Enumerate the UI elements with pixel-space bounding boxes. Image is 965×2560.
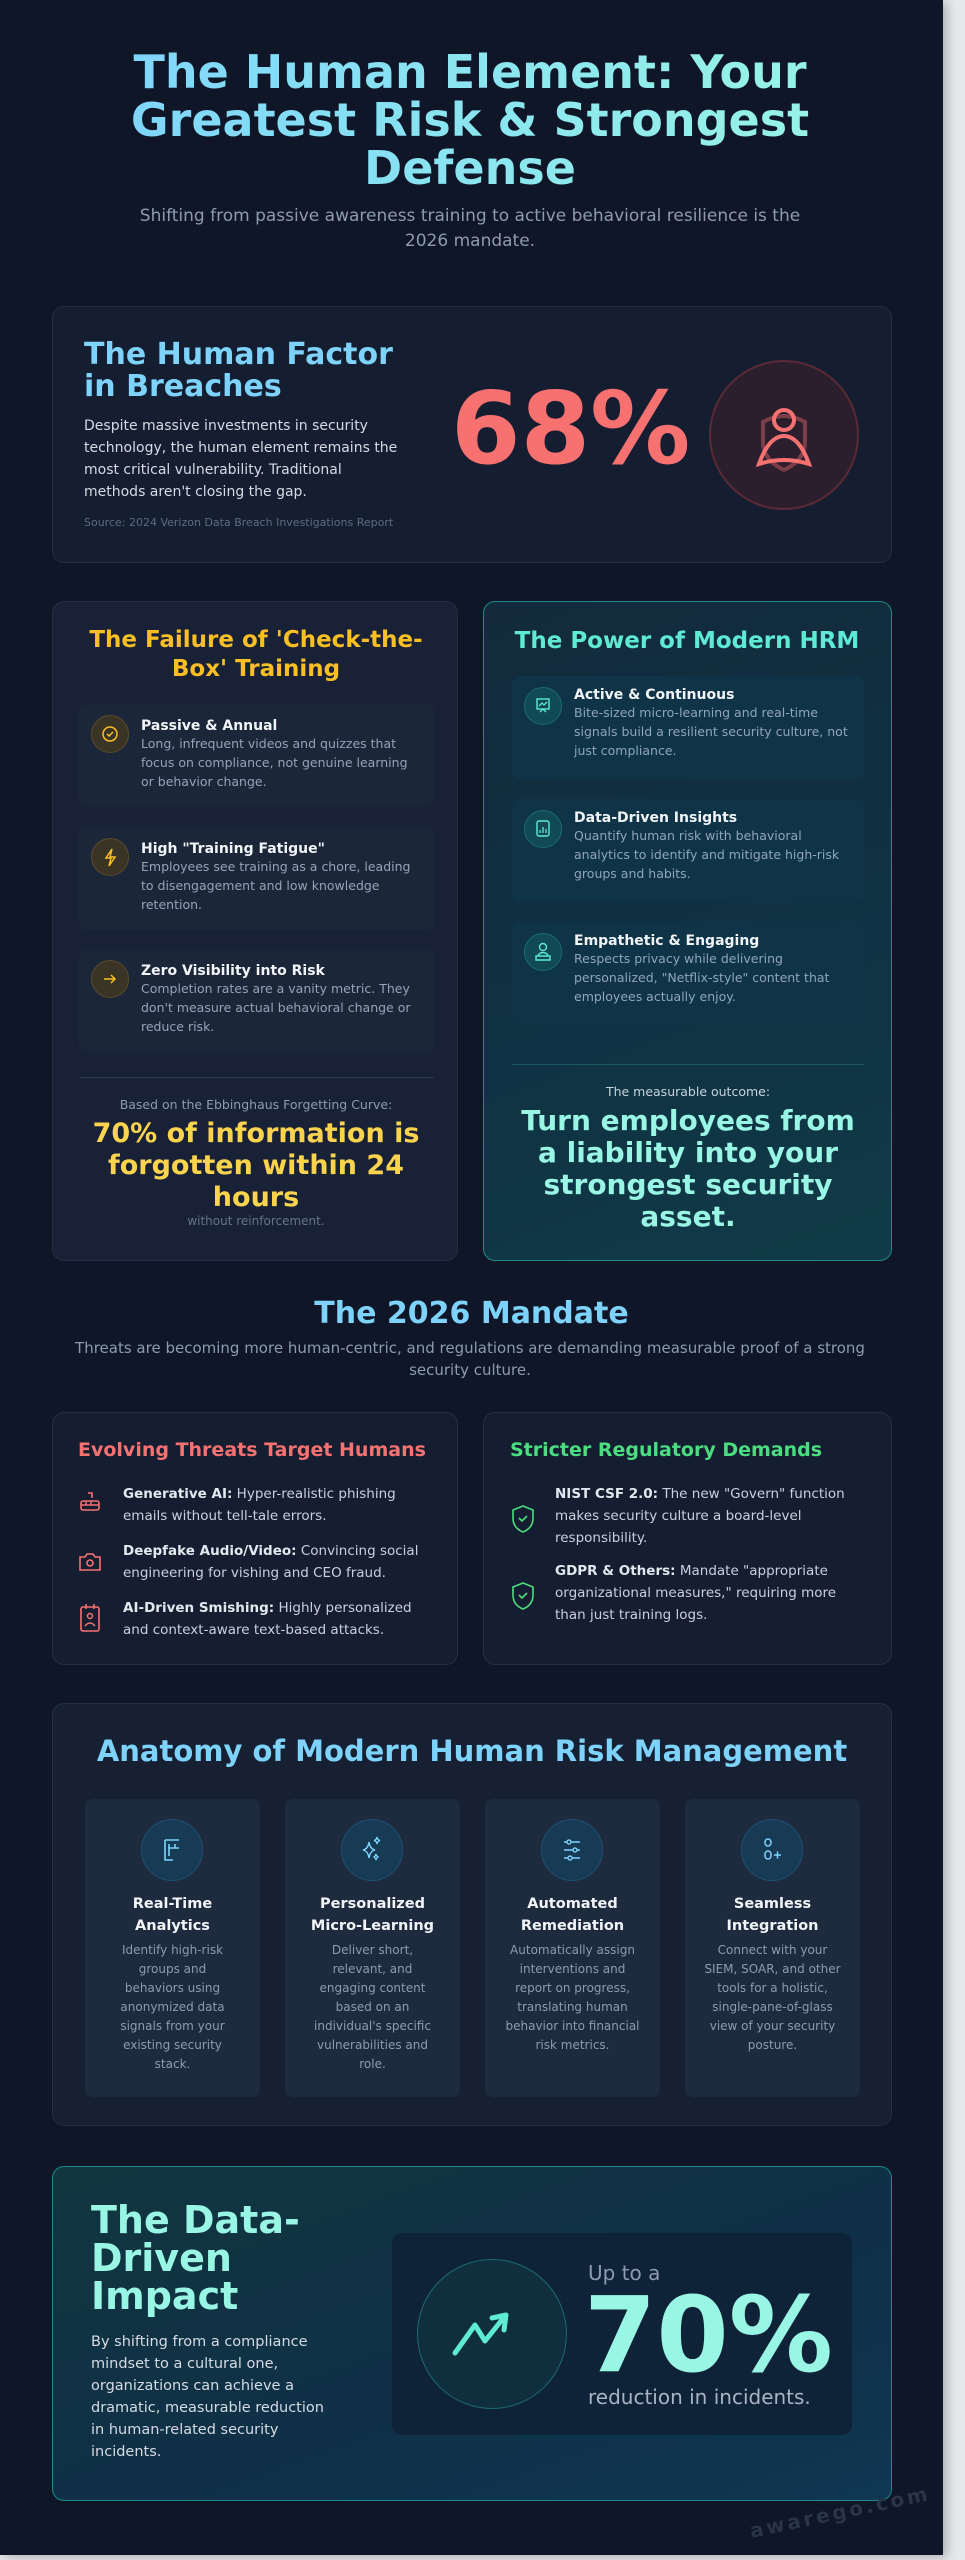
callout: forgetting curve: 70% of information is forgotten within 24 hours <box>93 1118 419 1213</box>
panel: evolving threats <box>52 1412 458 1665</box>
heading: regulatory: Stricter Regulatory Demands <box>510 1439 822 1461</box>
card: zero visibility <box>79 949 434 1052</box>
heading: failure: The Failure of 'Check-the-Box' Training <box>89 627 423 682</box>
text: human factor body: Despite massive investments in security technology, the human element remains the most critical vulnerability. Traditional methods aren't closing the gap. <box>84 418 397 500</box>
stat 68%: 68% <box>451 370 690 487</box>
callout: measurable outcome: Turn employees from a liability into your strongest security asset. <box>521 1104 855 1233</box>
heading: anatomy: Anatomy of Modern Human Risk Management <box>97 1734 847 1768</box>
card: active & continuous: Active & Continuous <box>574 687 734 703</box>
card: active & continuous: Bite-sized micro-learning and real-time signals build a resilient security culture, not just compliance. <box>574 705 848 758</box>
stat box: 70% reduction: 70% <box>584 2274 833 2396</box>
icon: arrow <box>91 960 129 998</box>
icon: sliders <box>541 1819 603 1881</box>
card: real-time analytics: Real-Time Analytics <box>133 1896 212 1934</box>
icon: shield check <box>512 1505 534 1533</box>
panel: regulatory demands <box>483 1412 892 1665</box>
icon: bolt <box>91 838 129 876</box>
subtitle: Shifting from passive awareness training to active behavioral resilience is the 2026 mandate. <box>140 206 800 251</box>
item: NIST: NIST CSF 2.0: The new "Govern" function makes security culture a board-level responsibility. <box>555 1486 845 1546</box>
icon: shield check <box>512 1582 534 1610</box>
card: data-driven insights: Data-Driven Insights <box>574 810 737 826</box>
card: training fatigue <box>79 827 434 930</box>
icon: presentation <box>524 687 562 725</box>
card: data-driven insights <box>512 799 864 902</box>
card: passive & annual <box>79 704 434 807</box>
panel: failure of check-the-box <box>52 601 458 1261</box>
icon: camera <box>79 1553 101 1571</box>
card: training fatigue: High "Training Fatigue" <box>141 841 325 857</box>
title: The Human Element: Your Greatest Risk & Strongest Defense <box>131 45 809 195</box>
heading: human factor: The Human Factor in Breaches <box>84 337 393 404</box>
card: data-driven insights: Quantify human risk with behavioral analytics to identify and mitigate high-risk groups and habits. <box>574 828 839 881</box>
text: impact body: By shifting from a compliance mindset to a cultural one, organizations can achieve a dramatic, measurable reduction in human-related security incidents. <box>91 2334 324 2460</box>
card: training fatigue: Employees see training as a chore, leading to disengagement and low knowledge retention. <box>141 859 410 912</box>
stat box: 70% reduction: Up to a <box>588 2261 660 2285</box>
card: automated remediation <box>485 1799 660 2097</box>
callout: forgetting curve: without reinforcement. <box>187 1214 325 1228</box>
card: automated remediation: Automated Remediation <box>521 1896 624 1934</box>
callout: measurable outcome: The measurable outcome: <box>606 1084 770 1099</box>
icon: id badge <box>80 1604 100 1632</box>
item: deepfake: Deepfake Audio/Video: Convincing social engineering for vishing and CEO fraud. <box>123 1543 418 1581</box>
heading: data-driven impact: The Data-Driven Impact <box>91 2198 300 2318</box>
panel: anatomy of HRM <box>52 1703 892 2126</box>
callout: forgetting curve: Based on the Ebbinghaus Forgetting Curve: <box>120 1097 392 1112</box>
icon: integration <box>741 1819 803 1881</box>
card: empathetic & engaging: Empathetic & Engaging <box>574 933 759 949</box>
card: zero visibility: Zero Visibility into Risk <box>141 963 325 979</box>
text: mandate subtitle: Threats are becoming more human-centric, and regulations are demanding measurable proof of a strong security culture. <box>75 1339 865 1379</box>
panel: data-driven impact <box>52 2166 892 2501</box>
icon: trending up <box>417 2259 567 2409</box>
heading: evolving threats: Evolving Threats Target Humans <box>78 1439 426 1461</box>
item: GDPR: GDPR & Others: Mandate "appropriate organizational measures," requiring more than just training logs. <box>555 1563 836 1623</box>
panel: human factor <box>52 306 892 563</box>
icon: sparkles <box>341 1819 403 1881</box>
card: seamless integration <box>685 1799 860 2097</box>
card: active & continuous <box>512 676 864 779</box>
card: personalized micro-learning <box>285 1799 460 2097</box>
icon: user shield <box>709 360 859 510</box>
card: automated remediation: Automatically assign interventions and report on progress, translating human behavior into financial risk metrics. <box>505 1943 640 2052</box>
card: seamless integration: Seamless Integration <box>726 1896 818 1934</box>
card: empathetic & engaging <box>512 922 864 1025</box>
card: passive & annual: Long, infrequent videos and quizzes that focus on compliance, not genuine learning or behavior change. <box>141 736 408 789</box>
card: real-time analytics <box>85 1799 260 2097</box>
card: empathetic & engaging: Respects privacy while delivering personalized, "Netflix-style" content that employees actually enjoy. <box>574 951 829 1004</box>
icon: chart <box>524 810 562 848</box>
icon: users <box>524 933 562 971</box>
card: seamless integration: Connect with your SIEM, SOAR, and other tools for a holistic, single-pane-of-glass view of your security posture. <box>704 1943 841 2052</box>
icon: router <box>80 1492 100 1511</box>
stat box: 70% reduction <box>392 2233 852 2435</box>
source note: Source: 2024 Verizon Data Breach Investigations Report <box>84 516 393 529</box>
icon: analytics <box>141 1819 203 1881</box>
item: generative AI: Generative AI: Hyper-realistic phishing emails without tell-tale errors. <box>123 1486 396 1524</box>
card: personalized micro-learning: Deliver short, relevant, and engaging content based on an individual's specific vulnerabilities and role. <box>314 1943 431 2071</box>
stat box: 70% reduction: reduction in incidents. <box>588 2385 811 2409</box>
card: personalized micro-learning: Personalized Micro-Learning <box>311 1896 434 1934</box>
heading: 2026 mandate: The 2026 Mandate <box>314 1296 629 1331</box>
heading: power of HRM: The Power of Modern HRM <box>515 628 859 654</box>
card: real-time analytics: Identify high-risk groups and behaviors using anonymized data signals from your existing security stack. <box>120 1943 225 2071</box>
panel: power of modern HRM <box>483 601 892 1261</box>
watermark: awarego.com <box>748 2481 932 2543</box>
icon: check circle <box>91 715 129 753</box>
item: smishing: AI-Driven Smishing: Highly personalized and context-aware text-based attacks. <box>123 1600 412 1638</box>
card: passive & annual: Passive & Annual <box>141 718 277 734</box>
card: zero visibility: Completion rates are a vanity metric. They don't measure actual behavioral change or reduce risk. <box>141 981 411 1034</box>
